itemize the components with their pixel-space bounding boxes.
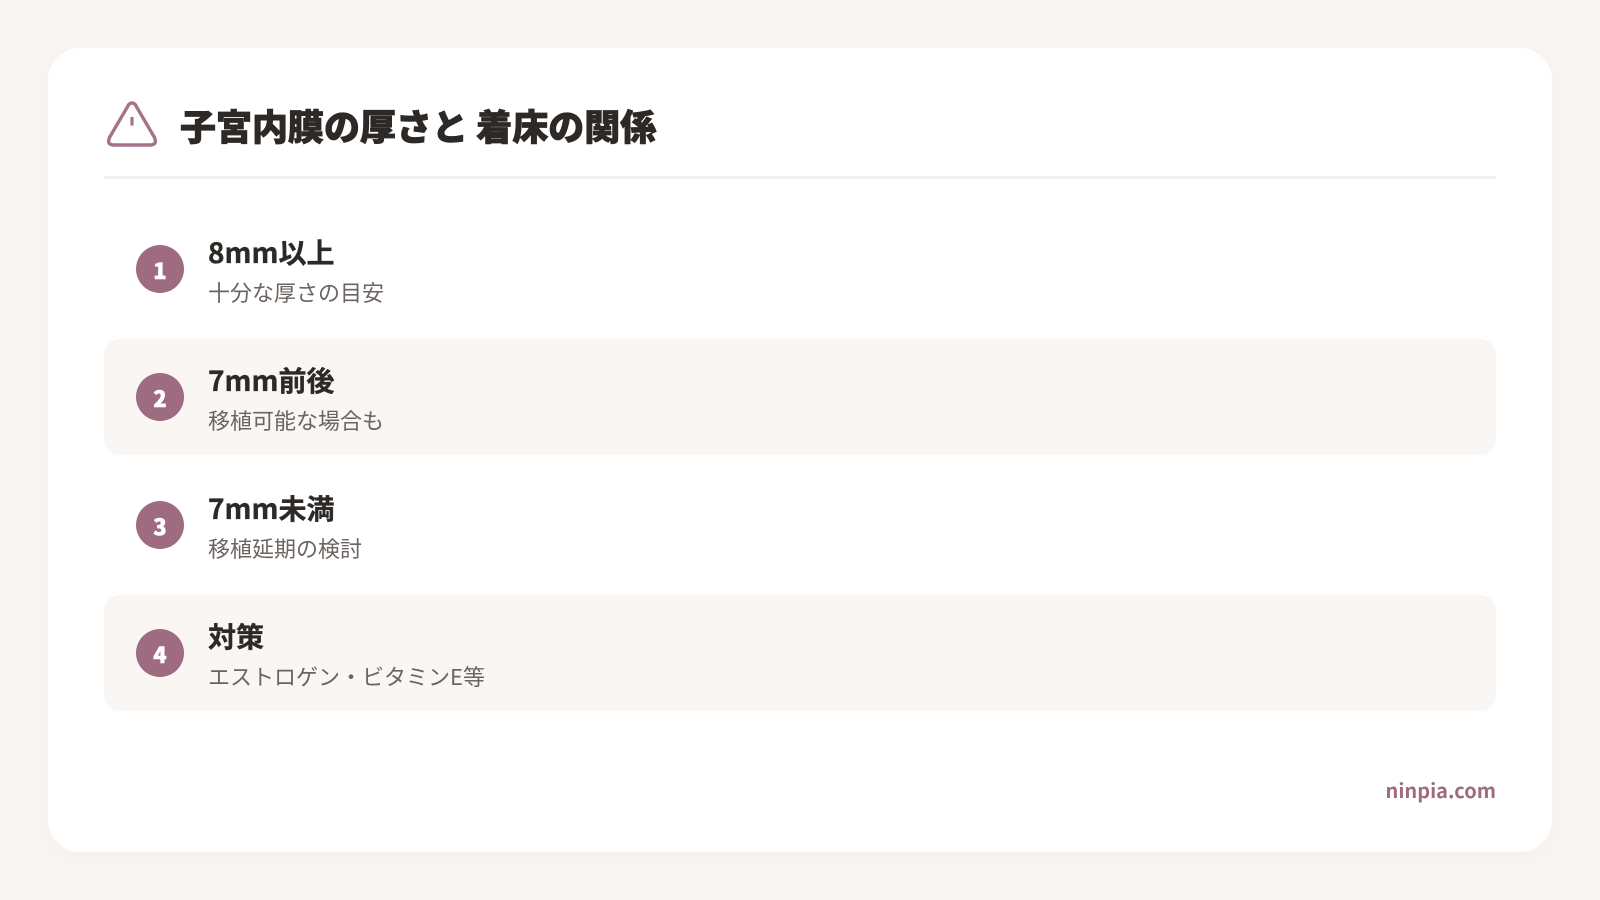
number badge 3: 3: [153, 510, 167, 542]
item description 2: 移植可能な場合も: [208, 404, 384, 436]
footer: source: ninpia.com: [1386, 775, 1496, 804]
item description 4: エストロゲン・ビタミンE等: [208, 660, 485, 692]
item heading 1: 8mm以上: [208, 232, 335, 272]
title: 子宮内膜の厚さと 着床の関係: [180, 99, 656, 151]
item heading 3: 7mm未満: [208, 488, 335, 528]
item heading 2: 7mm前後: [208, 360, 335, 400]
item heading 4: 対策: [208, 616, 264, 656]
number badge 4: 4: [153, 638, 167, 670]
item description 3: 移植延期の検討: [208, 532, 362, 564]
number badge 2: [136, 373, 184, 421]
list item 1: [136, 232, 384, 308]
number badge 2: 2: [153, 382, 167, 414]
number badge 3: [136, 501, 184, 549]
list item 3: [136, 488, 362, 564]
icon: warning triangle: [106, 101, 158, 147]
number badge 1: [136, 245, 184, 293]
list item 2: [104, 339, 1496, 455]
number badge 1: 1: [153, 254, 167, 286]
number badge 4: [136, 629, 184, 677]
item description 1: 十分な厚さの目安: [208, 276, 384, 308]
list item 4: [104, 595, 1496, 711]
